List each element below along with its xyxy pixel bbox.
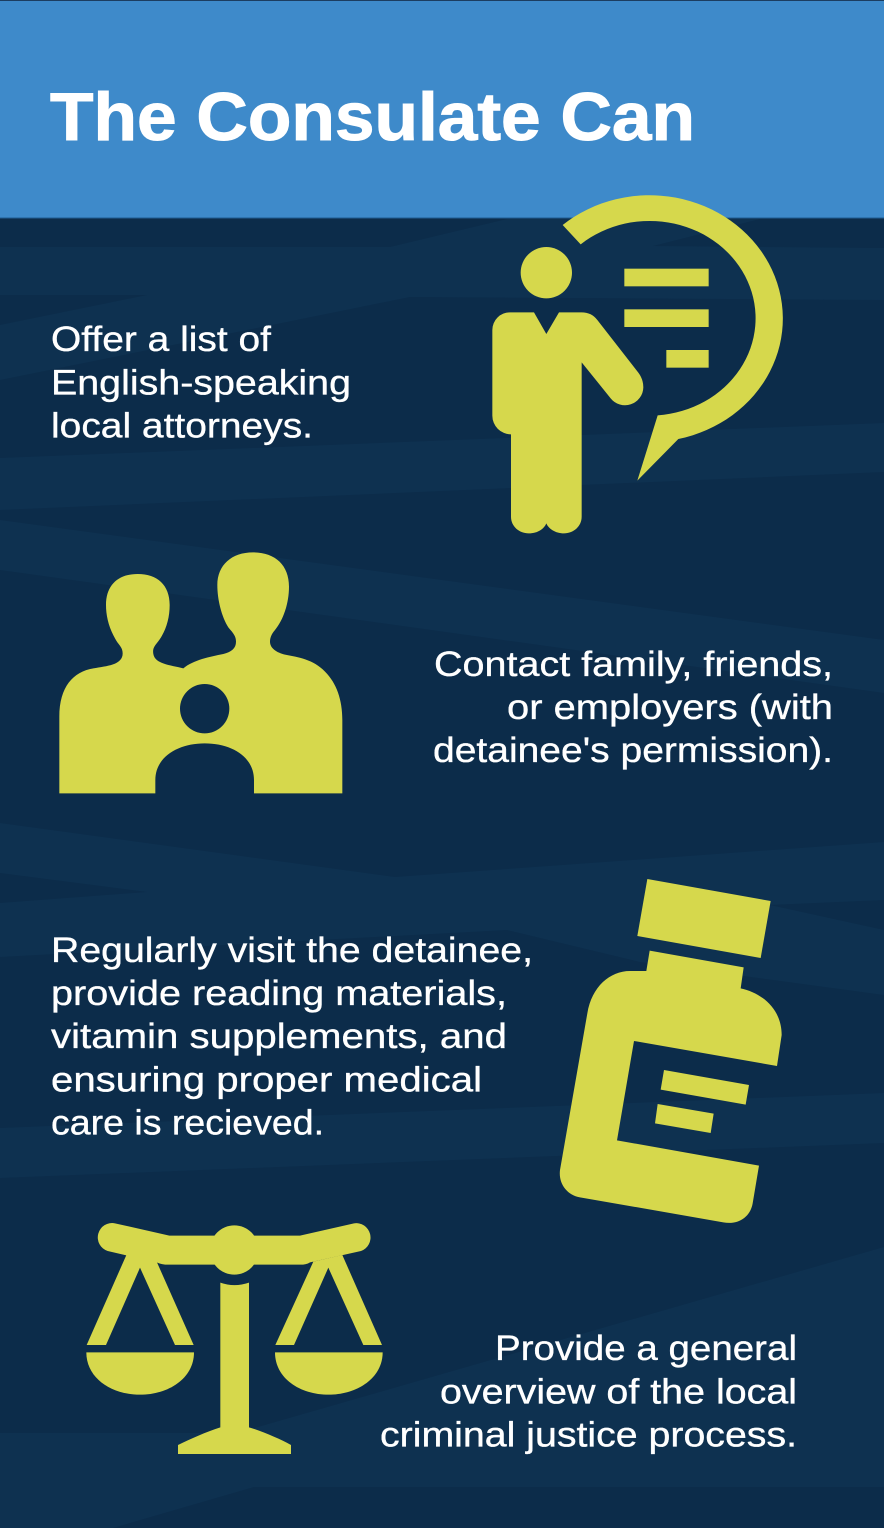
text block: visits: Regularly visit the detainee, [51, 931, 533, 970]
text block: visits: vitamin supplements, and [51, 1017, 507, 1056]
text block: attorneys [51, 320, 351, 446]
panel: attorneys [51, 195, 783, 533]
panel: visits [51, 879, 782, 1223]
text block: contact family: Contact family, friends, [434, 645, 833, 684]
text block: attorneys: local attorneys. [51, 406, 313, 446]
text block: contact family [433, 645, 833, 770]
icon: person with speech bubble [492, 195, 783, 533]
header band [0, 0, 884, 218]
panel: contact family [59, 552, 833, 793]
text block: contact family: detainee's permission). [433, 731, 833, 770]
icon: vitamin bottle [560, 879, 782, 1223]
text block: justice process: overview of the local [440, 1372, 797, 1412]
icon: scales of justice [86, 1223, 383, 1454]
text block: attorneys: Offer a list of [51, 320, 271, 359]
panel: justice process [86, 1223, 797, 1454]
text block: justice process: criminal justice process. [380, 1416, 797, 1454]
text block: justice process [380, 1329, 797, 1454]
text block: visits [51, 931, 533, 1142]
text block: visits: ensuring proper medical [51, 1060, 482, 1100]
text block: justice process: Provide a general [495, 1329, 797, 1368]
text block: attorneys: English-speaking [51, 364, 351, 402]
title: The Consulate Can [50, 79, 695, 155]
text block: visits: care is recieved. [51, 1104, 324, 1142]
text block: visits: provide reading materials, [51, 974, 507, 1013]
icon: family silhouettes [59, 552, 342, 793]
text block: contact family: or employers (with [507, 688, 833, 727]
